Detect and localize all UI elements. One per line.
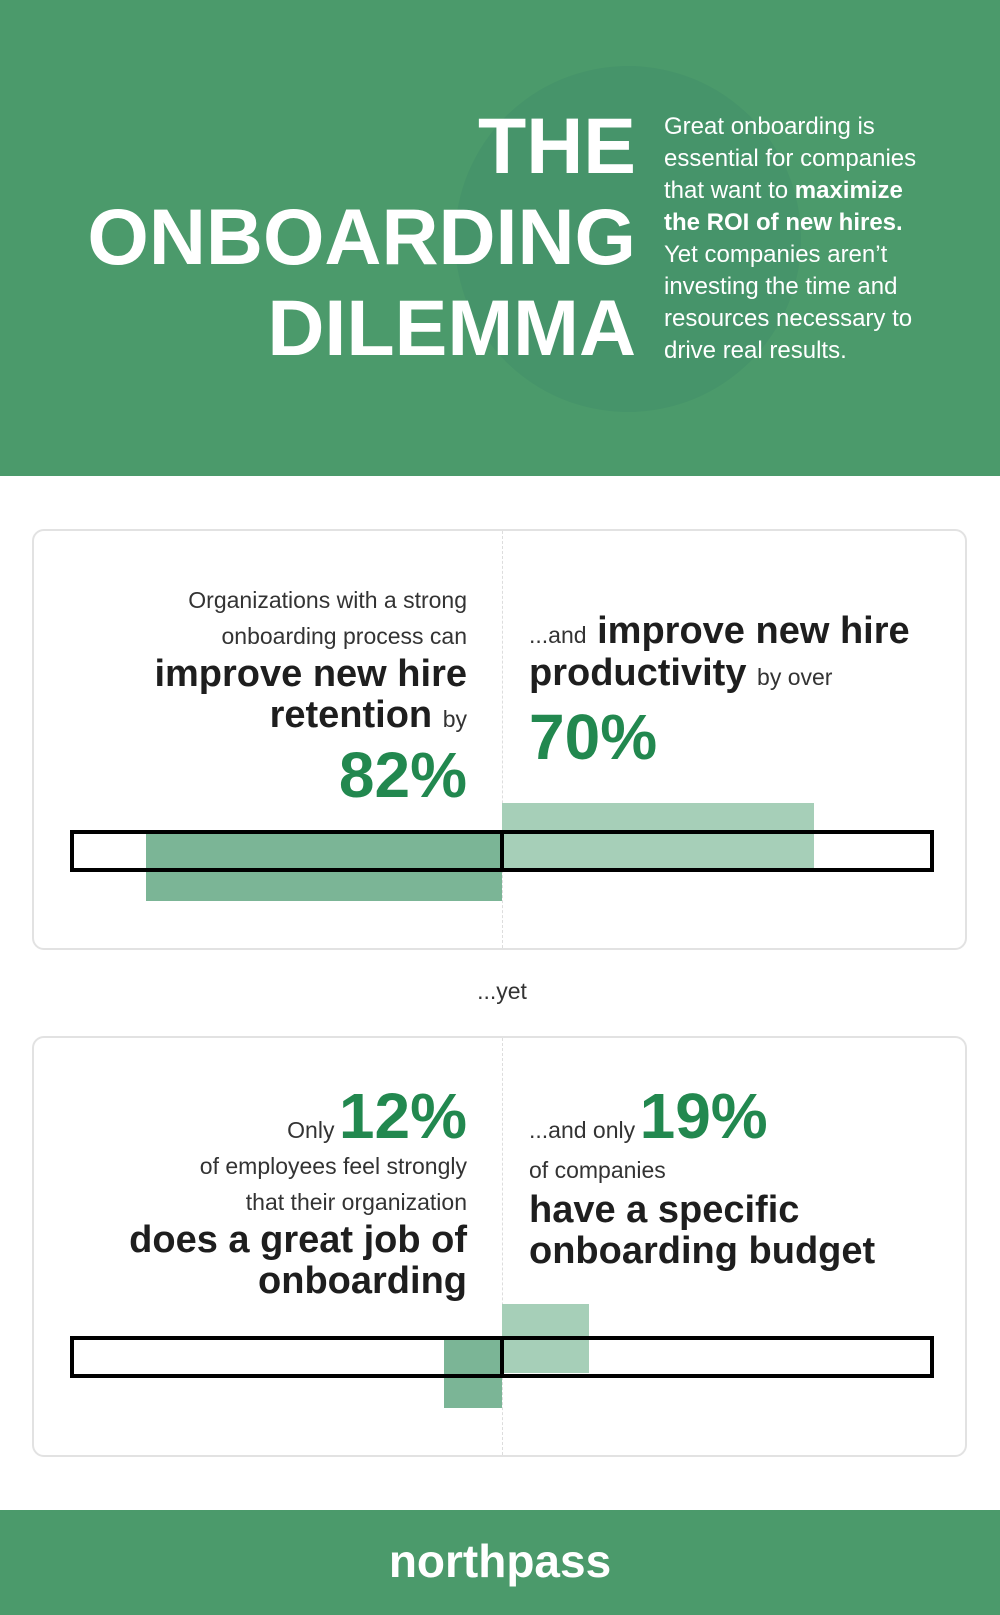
text: retention: retention by: [270, 694, 467, 736]
bar: 70%: [502, 803, 814, 868]
intro text: Yet companies aren’t: [664, 241, 887, 268]
text: retention: onboarding process can: [222, 623, 467, 649]
text: productivity: [529, 610, 910, 773]
intro text: Great onboarding is: [664, 113, 875, 140]
intro text: [664, 113, 916, 364]
text: retention: Organizations with a strong: [188, 587, 467, 613]
intro text: drive real results.: [664, 337, 847, 364]
text: retention: 82%: [339, 739, 467, 811]
text: productivity: productivity by over: [529, 652, 832, 694]
text: retention: improve new hire: [154, 653, 467, 695]
title: ONBOARDING: [87, 192, 636, 281]
panel: retention and productivity: [32, 529, 967, 950]
intro text: resources necessary to: [664, 305, 912, 332]
bar: 12%: [444, 1339, 502, 1408]
intro text: the ROI of new hires.: [664, 209, 903, 236]
logo: northpass: [389, 1535, 611, 1587]
text: 19%: have a specific: [529, 1189, 799, 1231]
bar outline: [70, 1336, 934, 1378]
yet: ...yet: [477, 978, 527, 1004]
text: productivity: 70%: [529, 701, 657, 773]
intro text: essential for companies: [664, 145, 916, 172]
text: 19%: onboarding budget: [529, 1230, 875, 1272]
text: 19%: of companies: [529, 1157, 666, 1183]
text: 12%: [129, 1080, 468, 1302]
text: 12%: Only 12%: [287, 1080, 467, 1152]
text: 12%: of employees feel strongly: [200, 1153, 467, 1179]
intro text: that want to maximize: [664, 177, 903, 204]
title: [87, 101, 636, 372]
text: 12%: does a great job of: [129, 1219, 467, 1261]
panel: onboarding reality: [32, 1036, 967, 1457]
text: 19%: ...and only 19%: [529, 1080, 768, 1152]
footer: [0, 1510, 1000, 1615]
title: THE: [478, 101, 636, 190]
text: 12%: that their organization: [246, 1189, 467, 1215]
intro text: investing the time and: [664, 273, 897, 300]
title: DILEMMA: [267, 283, 636, 372]
bar: 82%: [146, 834, 502, 901]
text: 12%: onboarding: [258, 1260, 467, 1302]
bar outline: [70, 830, 934, 872]
text: 19%: [529, 1080, 875, 1272]
decorative circle: [455, 66, 801, 412]
text: productivity: ...and improve new hire: [529, 610, 910, 652]
text: retention: [154, 587, 467, 811]
header: [0, 0, 1000, 476]
bar: 19%: [502, 1304, 589, 1373]
